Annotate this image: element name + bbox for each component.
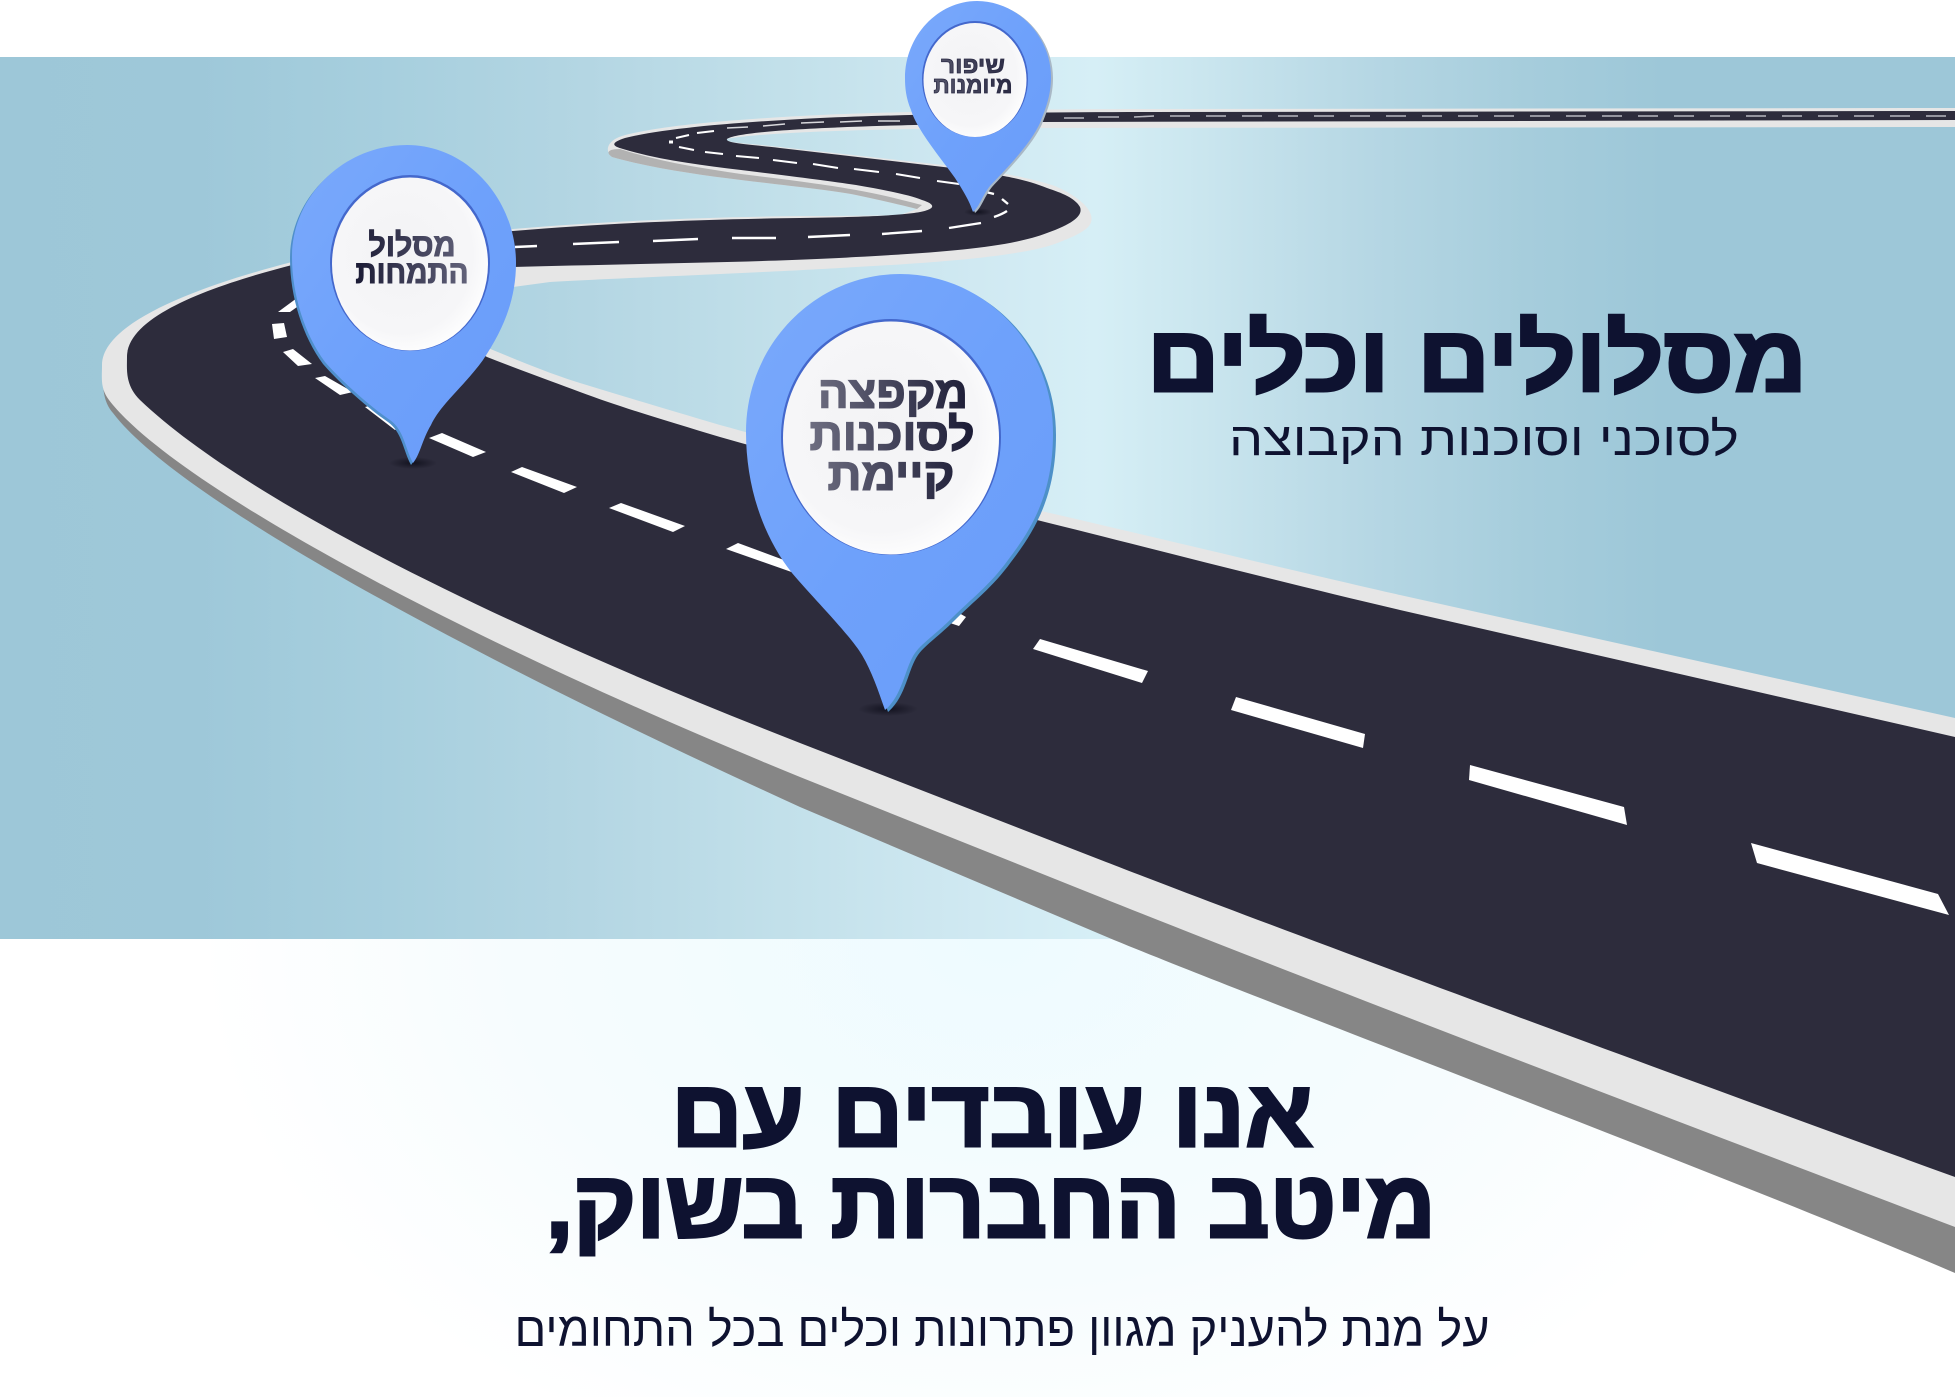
- winding road: [102, 108, 1955, 1273]
- road side shadow: [103, 370, 1955, 1273]
- pin label: מיומנות: [934, 72, 1012, 98]
- pin label: מקפצה: [818, 367, 968, 418]
- caption: על מנת להעניק מגוון פתרונות וכלים בכל התחומים: [514, 1304, 1490, 1357]
- main lane dashes: [272, 298, 1949, 915]
- pin label: מסלול: [368, 227, 456, 263]
- road asphalt: [127, 111, 1955, 1177]
- pin: מסלול התמחות: [290, 145, 516, 469]
- pin label: לסוכנות: [810, 409, 974, 460]
- pin label: [934, 52, 1012, 98]
- subheading: לסוכני וסוכנות הקבוצה: לסוכני וסוכנות הקבוצה: [1229, 412, 1739, 465]
- title: אנו עובדים עם: [671, 1061, 1313, 1167]
- pin label: התמחות: [356, 254, 468, 290]
- pin: מקפצה לסוכנות קיימת: [746, 274, 1056, 716]
- pin label: [356, 227, 468, 290]
- pin: שיפור מיומנות: [905, 1, 1053, 216]
- background: blue gradient band: [0, 57, 1955, 939]
- road curb: [102, 108, 1955, 1227]
- title: מיטב החברות בשוק,: [546, 1152, 1436, 1258]
- pin label: שיפור: [941, 52, 1005, 78]
- far lane dashes: [515, 116, 1946, 247]
- title: [546, 1061, 1436, 1258]
- pin label: [810, 367, 974, 500]
- pin label: קיימת: [828, 449, 954, 500]
- heading: מסלולים וכלים: מסלולים וכלים: [1147, 307, 1807, 411]
- far curb darker side: [608, 149, 922, 209]
